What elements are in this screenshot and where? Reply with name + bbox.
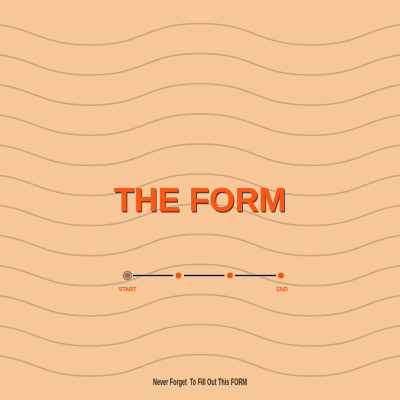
title: THE FORM <box>114 181 286 218</box>
step marker 2 <box>176 272 182 278</box>
timeline <box>119 271 288 293</box>
start marker <box>123 271 132 280</box>
title: THE FORM <box>115 182 287 220</box>
footer text: Never Forget To Fill Out This FORM <box>153 377 247 387</box>
start label: START <box>119 287 137 293</box>
step marker 3 <box>227 272 233 278</box>
end marker <box>278 272 284 278</box>
end label: END <box>276 287 288 293</box>
